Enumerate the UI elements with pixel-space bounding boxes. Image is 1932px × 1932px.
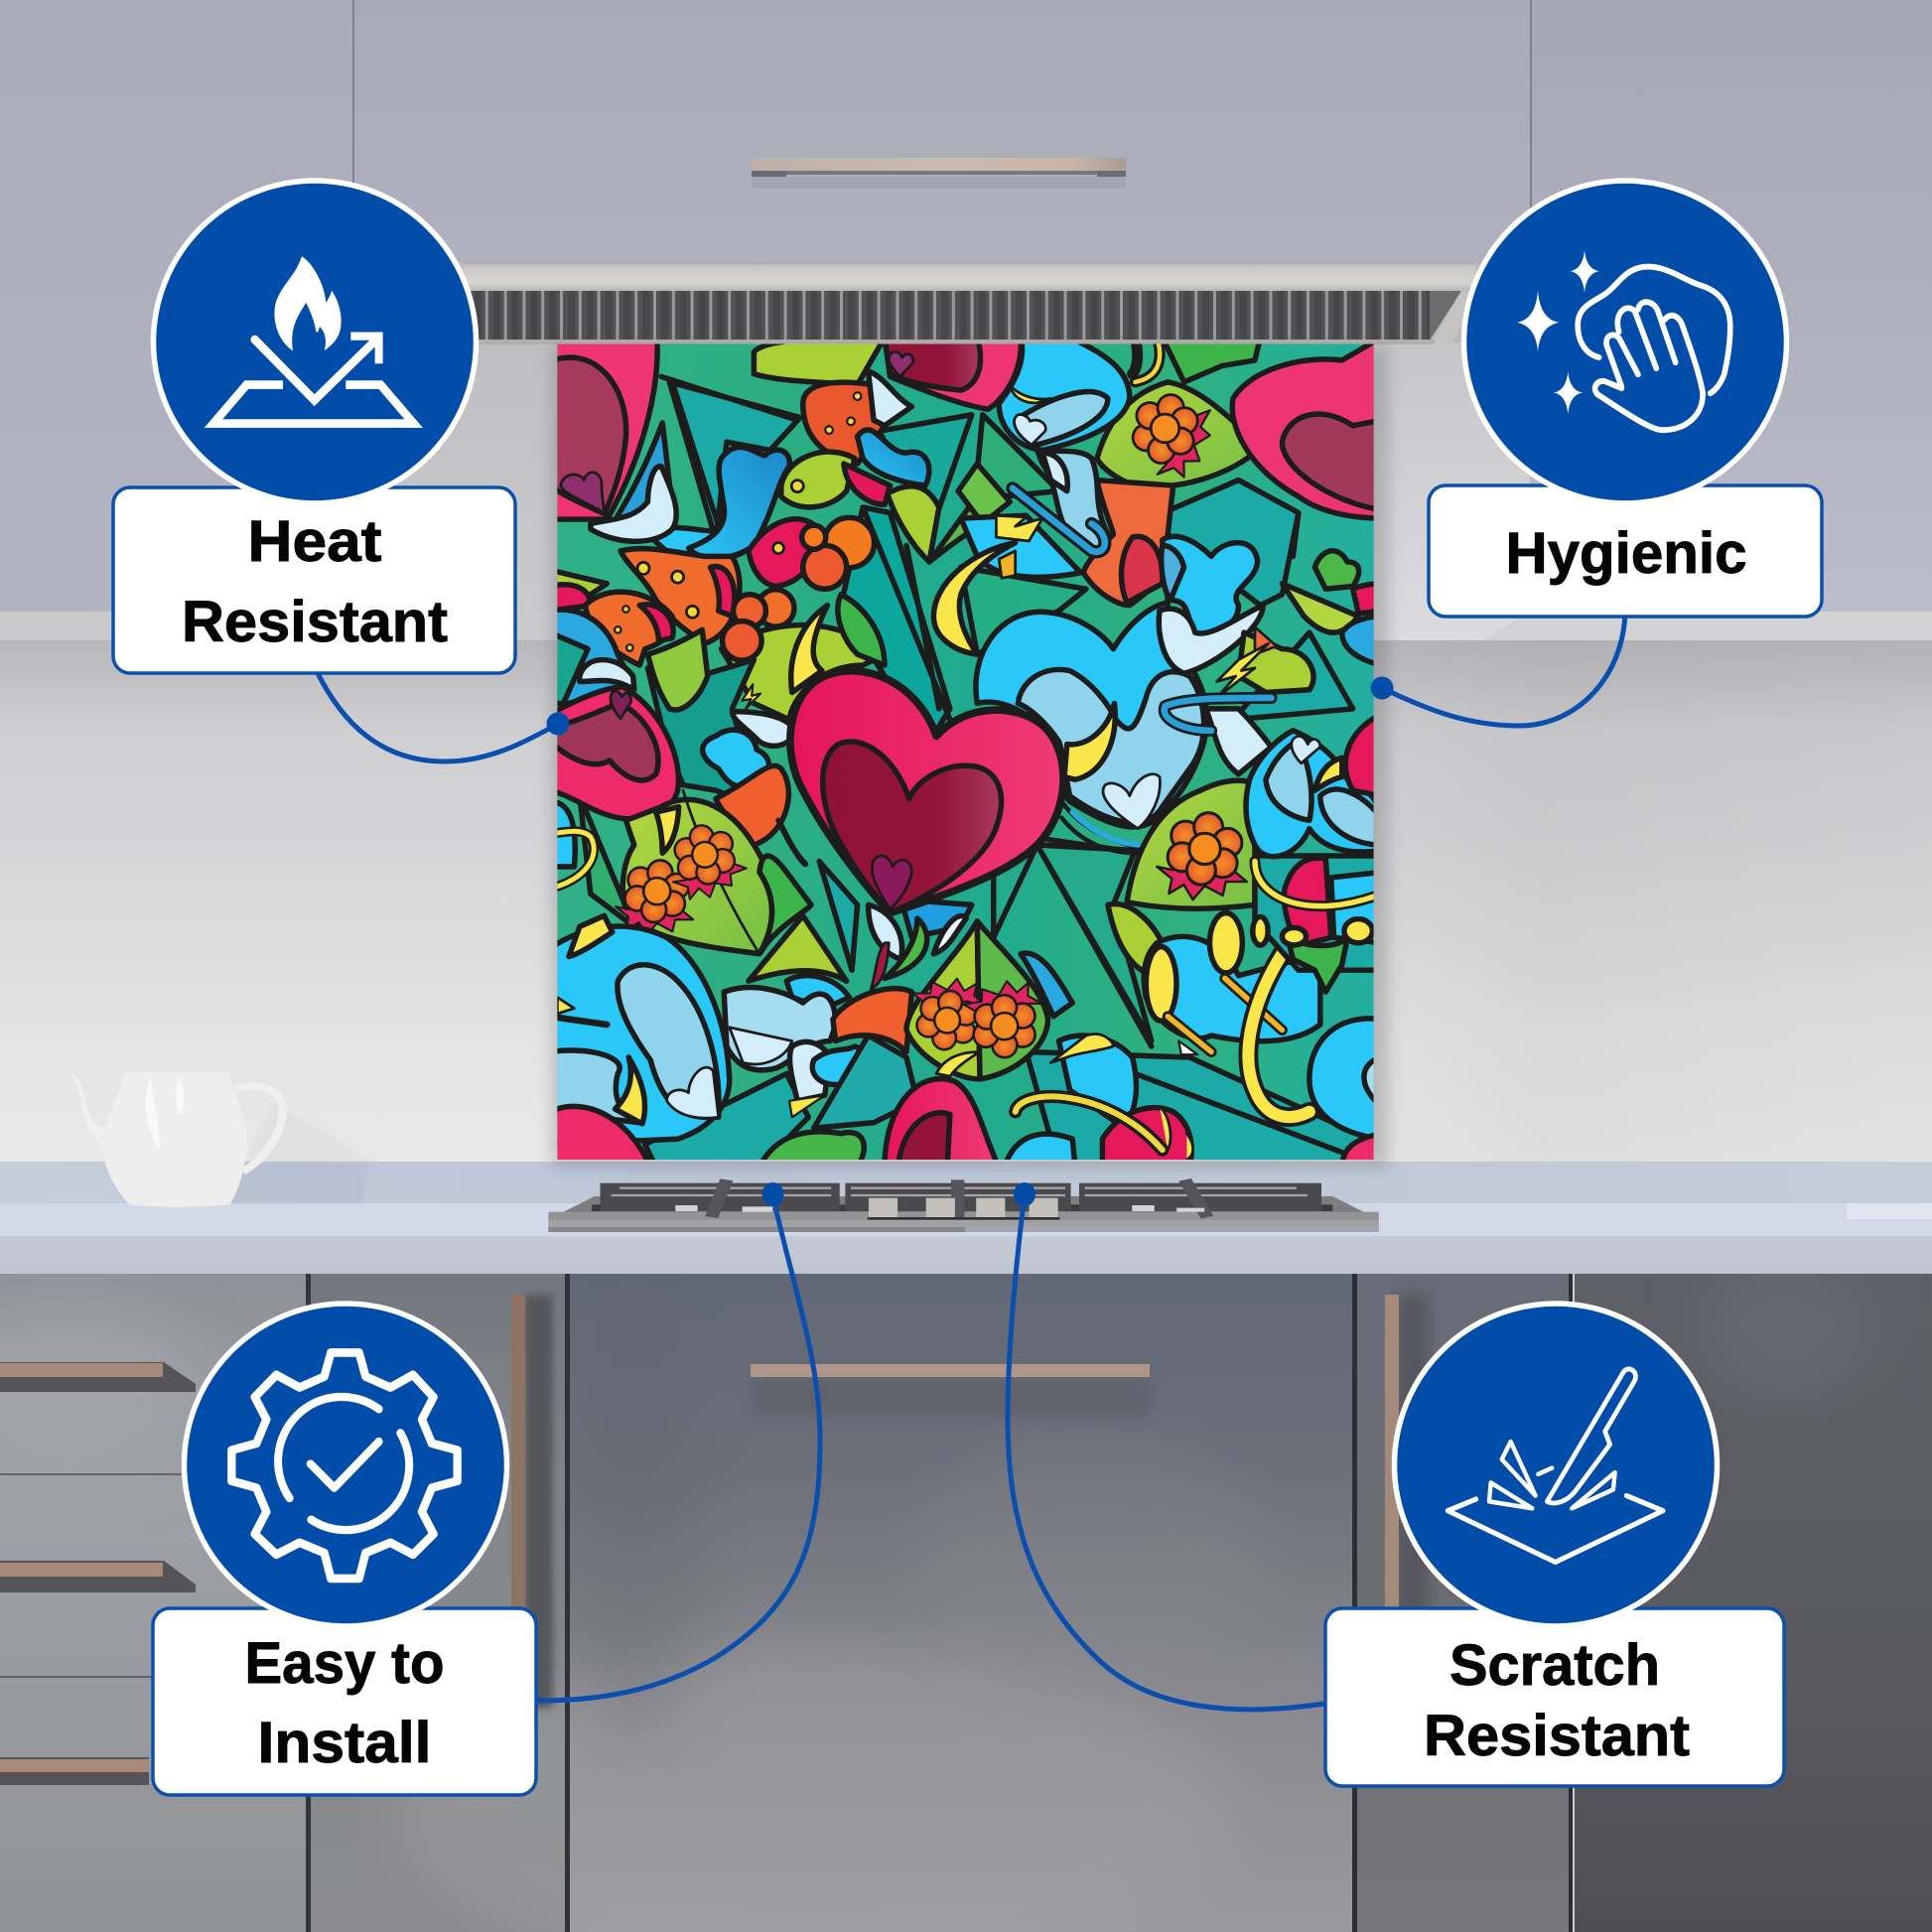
left door handle <box>511 1295 553 1708</box>
badge disc <box>1463 181 1787 503</box>
wall <box>0 262 1932 1167</box>
light green field behind heart <box>721 625 885 720</box>
text: easy to install: Easy to <box>244 1631 445 1696</box>
right blue heart <box>1246 714 1381 857</box>
upper right cabinet <box>1530 0 1932 612</box>
worktop front <box>0 1236 1932 1274</box>
cooktop <box>548 1179 1379 1232</box>
badge disc <box>153 181 477 503</box>
text: hygienic: Hygienic <box>1505 521 1747 586</box>
colourful heart artwork panel <box>550 338 1381 1168</box>
upper right orange <box>1083 481 1173 606</box>
right door handle <box>1385 1295 1428 1622</box>
top right heart <box>1232 338 1381 518</box>
left blue top swirl <box>550 610 634 720</box>
shadow under ledge <box>0 640 1932 730</box>
label box <box>1429 485 1822 617</box>
icon: hand wiping with sparkles <box>1517 250 1730 430</box>
panel shadow <box>552 347 1388 1168</box>
bottom heart <box>885 1079 999 1168</box>
bottom-left blue heart <box>550 915 730 1168</box>
text: scratch resistant: Scratch <box>1449 1633 1660 1698</box>
top maroon heart <box>885 338 1021 409</box>
label box <box>1325 1608 1784 1786</box>
connector: scratch resistant <box>1008 1182 1324 1710</box>
callout: hygienic <box>1429 181 1822 617</box>
worktop <box>0 1203 1932 1237</box>
central heart with yellow horn <box>790 606 1063 913</box>
yellow curved tail and lightning <box>933 515 1042 654</box>
bottom right blue and rope <box>1005 1035 1193 1168</box>
upper left cabinet <box>0 0 387 612</box>
connector: easy to install <box>537 1182 820 1701</box>
callout: heat resistant <box>113 181 515 673</box>
icon: knife on scratch-proof surface <box>1448 1369 1663 1562</box>
badge disc <box>185 1304 506 1626</box>
orange mushroom left <box>550 517 875 665</box>
label box <box>153 1608 536 1795</box>
text: heat resistant: Resistant <box>182 590 448 654</box>
extractor hood <box>463 262 1484 345</box>
badge disc <box>1394 1304 1718 1626</box>
text: heat resistant: Heat <box>248 509 381 574</box>
bottom berry leaf <box>906 921 1072 1079</box>
top centre fruit <box>754 338 1010 562</box>
text: easy to install: Install <box>258 1711 431 1775</box>
right ropes and pink <box>1253 856 1381 992</box>
teapot <box>70 1072 376 1207</box>
icon: gear with check mark <box>231 1352 458 1579</box>
icon: flame rising from surface <box>213 256 414 424</box>
text: scratch resistant: Resistant <box>1424 1704 1690 1768</box>
left berry leaf <box>616 790 775 954</box>
bottom centre cloud and fruit <box>724 899 972 1168</box>
green leaf left <box>647 629 708 710</box>
blue loop <box>1013 488 1105 552</box>
left cabinet ledge <box>0 612 387 641</box>
top-left heart <box>550 338 657 519</box>
callout: scratch resistant <box>1325 1304 1784 1786</box>
upper centre cabinet <box>354 0 1530 262</box>
teal background facets <box>580 382 1381 1168</box>
right berry leaf <box>1127 780 1255 908</box>
top right berry leaf <box>1097 338 1260 489</box>
top-left blue and white shapes <box>591 423 789 562</box>
far left pieces <box>550 801 847 981</box>
hob grates <box>601 1179 1321 1217</box>
left drawer handles <box>0 1362 196 1785</box>
right lower blue with yellow <box>1108 904 1381 1168</box>
connector: heat resistant <box>316 669 570 761</box>
right cabinet ledge <box>1483 612 1932 640</box>
right cluster blue butterfly <box>1159 536 1381 698</box>
upper cabinet handle <box>752 158 1126 189</box>
top centre blue heart <box>961 338 1130 577</box>
backsplash lower band <box>0 1162 1932 1204</box>
centre drawer handle <box>751 1364 1150 1417</box>
centre right blue heart <box>976 603 1206 853</box>
lower cabinets <box>0 1261 1932 1932</box>
callout: easy to install <box>153 1304 536 1795</box>
right blue loop and cloud <box>1165 698 1271 774</box>
left mid heart <box>550 687 678 819</box>
label box <box>113 487 515 673</box>
connector: hygienic <box>1370 613 1625 726</box>
lightning and blue wing <box>703 684 795 845</box>
